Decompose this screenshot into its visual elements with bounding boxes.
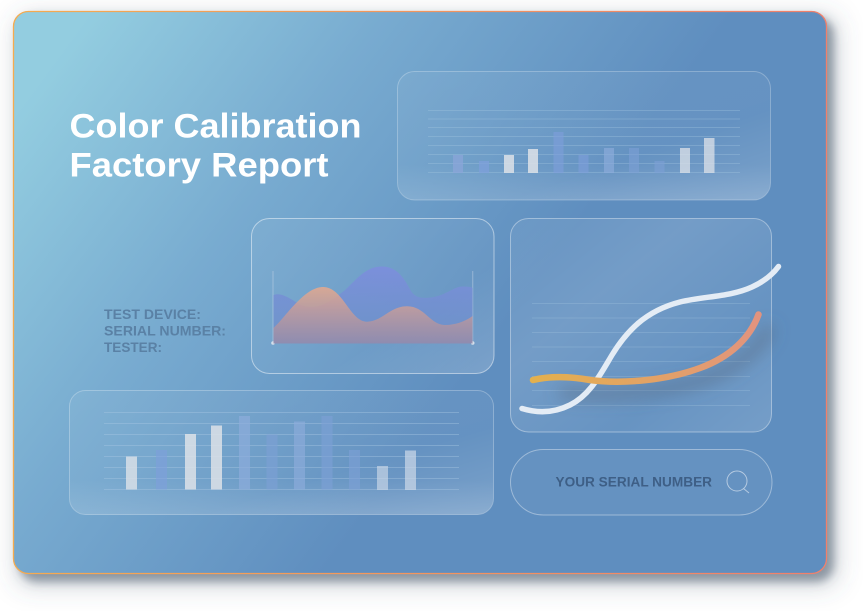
- curve shadow: [560, 326, 770, 394]
- panel: top bar chart: [398, 72, 770, 200]
- pill label: YOUR SERIAL NUMBER: [556, 474, 712, 490]
- device information labels: TEST DEVICE:: [104, 306, 201, 322]
- panel: curve chart: [510, 218, 778, 432]
- grid lines: [104, 412, 459, 490]
- title: Color Calibration: [70, 108, 362, 146]
- grid lines: [428, 110, 740, 172]
- panel bottom glow: [70, 391, 493, 514]
- panel glass: [398, 72, 770, 200]
- panel: bottom bar chart: [70, 390, 494, 514]
- blue area series: [274, 266, 472, 344]
- panel: area chart: [252, 218, 494, 374]
- axis lines: [271, 271, 475, 345]
- device information labels: SERIAL NUMBER:: [104, 322, 226, 338]
- panel bottom glow: [398, 72, 770, 200]
- panel glass: [70, 390, 494, 514]
- grid lines: [532, 304, 750, 406]
- bars: [453, 132, 714, 173]
- device information labels: [104, 306, 226, 355]
- title: Factory Report: [70, 146, 328, 184]
- white curve: [522, 266, 778, 412]
- icon: magnifying glass: [727, 471, 749, 493]
- device information labels: TESTER:: [104, 339, 162, 355]
- title: [70, 108, 362, 184]
- search pill: [510, 450, 772, 515]
- panel glass: [510, 218, 772, 432]
- orange area series: [274, 287, 472, 344]
- panel glass: [252, 218, 494, 374]
- pill outline: [510, 450, 772, 515]
- orange curve: [533, 314, 758, 382]
- bars: [126, 416, 416, 490]
